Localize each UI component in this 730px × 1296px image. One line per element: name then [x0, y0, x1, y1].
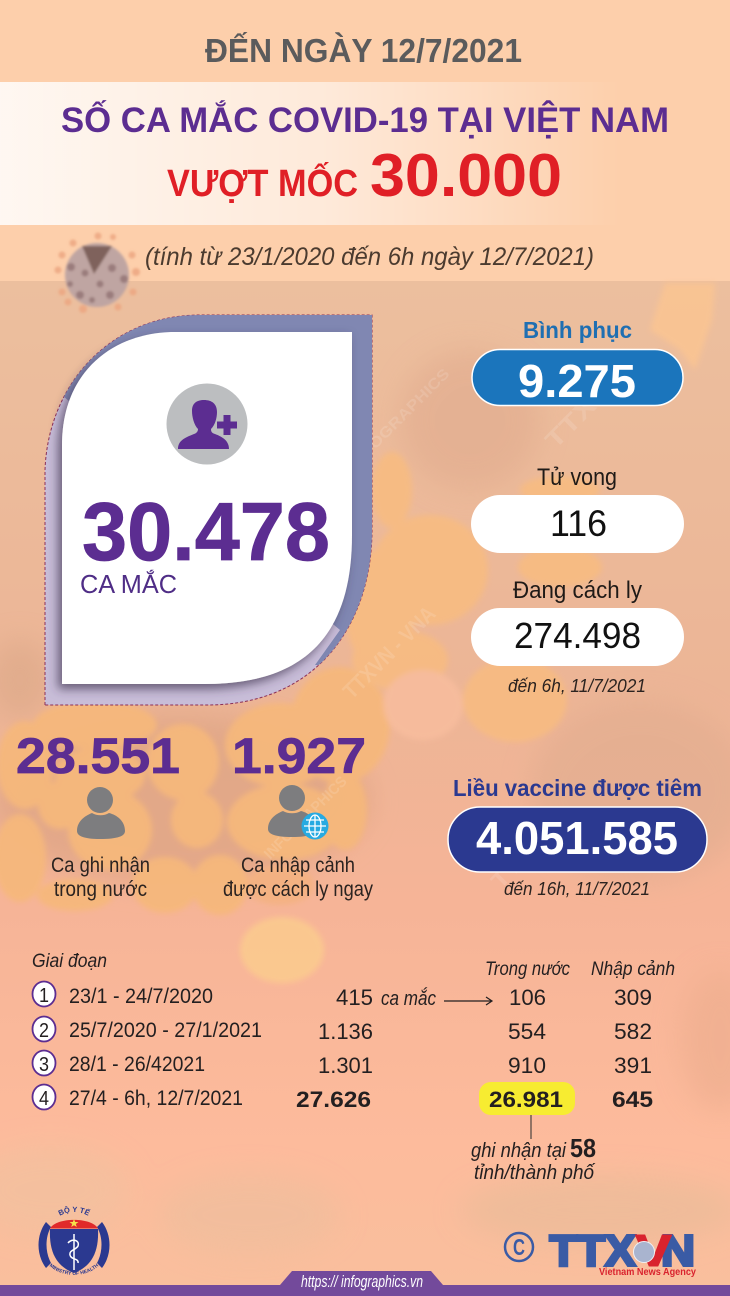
stat: vaccine doses: 4.051.585 — [476, 812, 678, 864]
table headers: Giai đoạn — [32, 951, 107, 972]
row 3: 3 — [39, 1054, 49, 1076]
watermarks: TTXVN — [486, 812, 567, 894]
callout: provinces: ghi nhận tại — [471, 1140, 567, 1162]
watermarks: TTXVN — [540, 361, 633, 454]
logo: Ministry of Health — [38, 1206, 110, 1275]
row 3: 28/1 - 26/42021 — [69, 1053, 205, 1076]
stat: deaths: Tử vong — [537, 464, 617, 491]
stat: imported cases: được cách ly ngay — [223, 878, 373, 901]
row 2 — [32, 1016, 652, 1044]
watermarks: TTXVN - VNA — [338, 601, 440, 704]
row 3: 391 — [614, 1053, 652, 1078]
logo: Ministry of Health: MINISTRY OF HEALTH — [50, 1263, 98, 1275]
icon: person with plus — [166, 384, 248, 464]
copyright mark: C — [513, 1234, 525, 1260]
stat: imported cases: 1.927 — [232, 728, 366, 784]
logo: TTXVN Vietnam News Agency: V — [636, 1226, 672, 1276]
stat: vaccine doses — [448, 775, 707, 899]
stat: vaccine doses: Liều vaccine được tiêm — [453, 775, 702, 801]
row 3: 910 — [508, 1053, 546, 1078]
logo: Ministry of Health: BỘ Y TẾ — [58, 1206, 91, 1216]
callout: provinces — [471, 1115, 596, 1184]
total cases label: CA MẮC — [80, 569, 177, 599]
heading: date: ĐẾN NGÀY 12/7/2021 — [205, 32, 522, 69]
orange cell cluster, lower left — [0, 667, 390, 983]
stat: deaths — [471, 464, 684, 553]
stat: domestic cases — [16, 728, 180, 901]
row 1: 309 — [614, 985, 652, 1010]
row 4: 645 — [612, 1087, 653, 1112]
title: VƯỢT MỐC — [167, 160, 358, 205]
footer bar with url tab: https:// infographics.vn — [301, 1272, 423, 1291]
footer bar with url tab — [0, 1271, 730, 1296]
row 4: 27/4 - 6h, 12/7/2021 — [69, 1087, 243, 1110]
row 4: 26.981 — [489, 1087, 563, 1112]
orange cells, right of card — [345, 283, 715, 742]
header band: translucent white strip — [0, 82, 730, 225]
copyright mark — [505, 1233, 533, 1261]
stat: imported cases: Ca nhập cảnh — [241, 854, 355, 877]
icon: coronavirus — [54, 232, 140, 313]
callout: provinces: 58 — [570, 1133, 596, 1163]
icon: person with globe — [268, 785, 328, 840]
stat: recovered: Bình phục — [523, 317, 632, 343]
stat: recovered: 9.275 — [518, 355, 636, 407]
logo: TTXVN Vietnam News Agency: Vietnam News Agency — [599, 1266, 696, 1278]
row 1: 106 — [509, 985, 546, 1010]
stat: in quarantine — [471, 577, 684, 696]
stat: in quarantine: đến 6h, 11/7/2021 — [508, 676, 646, 696]
logo: TTXVN Vietnam News Agency: N — [661, 1226, 695, 1276]
table headers: Nhập cảnh — [591, 959, 675, 980]
row 4: 4 — [39, 1088, 49, 1110]
stat: domestic cases: trong nước — [54, 878, 147, 901]
icon: person — [77, 787, 125, 839]
table headers — [32, 951, 675, 980]
row 1 — [32, 982, 652, 1010]
stat: deaths: 116 — [550, 503, 607, 544]
subtitle: time range: (tính từ 23/1/2020 đến 6h ngày 12/7/2021) — [145, 243, 594, 271]
row 1: 23/1 - 24/7/2020 — [69, 985, 213, 1008]
row 2: 2 — [39, 1020, 49, 1042]
title — [61, 100, 669, 209]
panel: total cases card — [45, 300, 400, 705]
row 2: 582 — [614, 1019, 652, 1044]
watermarks: INFOGRAPHICS — [261, 773, 351, 863]
row 3: 1.301 — [318, 1053, 373, 1078]
stat: domestic cases: 28.551 — [16, 728, 180, 784]
row 2: 1.136 — [318, 1019, 373, 1044]
logo: TTXVN Vietnam News Agency: TTX — [550, 1226, 636, 1276]
title: 30.000 — [370, 142, 562, 209]
row 4: 27.626 — [296, 1087, 371, 1112]
stat: domestic cases: Ca ghi nhận — [51, 854, 150, 877]
row 1: ca mắc — [381, 987, 436, 1010]
title: SỐ CA MẮC COVID-19 TẠI VIỆT NAM — [61, 100, 669, 140]
total cases number: 30.478 — [82, 485, 330, 578]
stat: imported cases — [223, 728, 373, 901]
row 4 — [32, 1082, 653, 1115]
row 2: 25/7/2020 - 27/1/2021 — [69, 1019, 262, 1042]
logo: TTXVN Vietnam News Agency — [505, 1226, 696, 1278]
table headers: Trong nước — [485, 959, 570, 980]
table: cases by period — [32, 951, 675, 1184]
stat: vaccine doses: đến 16h, 11/7/2021 — [504, 879, 650, 899]
stat: in quarantine: 274.498 — [514, 615, 641, 656]
stat: in quarantine: Đang cách ly — [513, 577, 642, 604]
row 2: 554 — [508, 1019, 546, 1044]
row 1: 1 — [39, 985, 49, 1007]
watermarks — [261, 361, 633, 894]
watermarks: INFOGRAPHICS — [346, 365, 453, 473]
row 3 — [32, 1050, 652, 1078]
callout: provinces: tỉnh/thành phố — [474, 1162, 596, 1184]
stat: recovered — [472, 317, 683, 407]
row 1: 415 — [336, 985, 373, 1010]
